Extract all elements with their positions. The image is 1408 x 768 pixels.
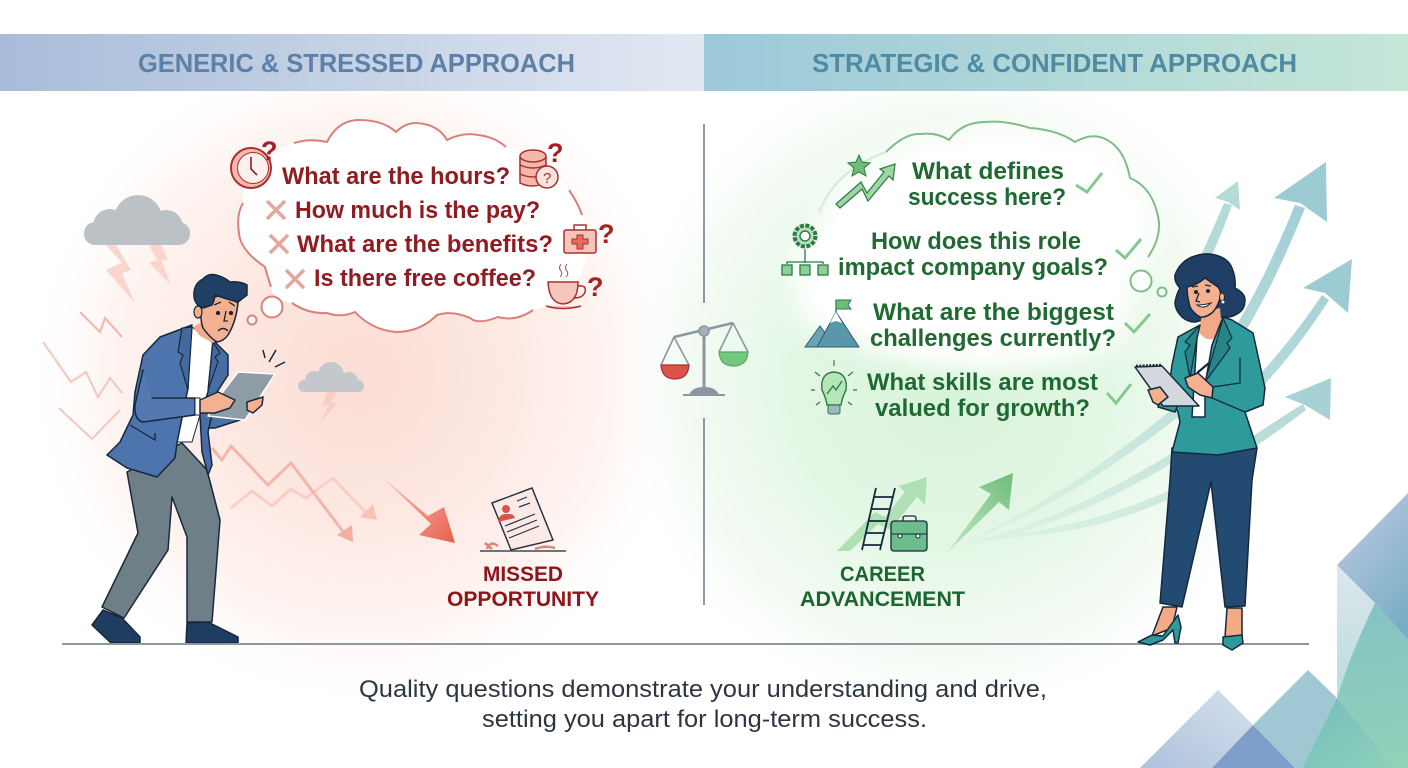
icon: coins: ? xyxy=(543,170,551,187)
icon: coins xyxy=(520,138,564,188)
question: company goals: impact company goals? xyxy=(838,254,1108,281)
label: missed opportunity: MISSED xyxy=(483,563,563,586)
label: missed opportunity: OPPORTUNITY xyxy=(447,588,599,611)
background glow: red side xyxy=(0,91,704,768)
center divider xyxy=(703,124,705,605)
hair xyxy=(194,274,247,308)
notepad xyxy=(1135,365,1199,406)
right arm xyxy=(1212,358,1245,412)
hands and pen xyxy=(1148,363,1213,405)
icon: medical kit xyxy=(564,219,614,253)
question: skills xyxy=(867,369,1098,422)
check marks xyxy=(1076,173,1150,403)
storm cloud large xyxy=(84,195,190,245)
red down arrow xyxy=(381,476,455,543)
right lapel xyxy=(208,342,220,390)
icon: light bulb xyxy=(811,360,857,414)
footer takeaway: setting you apart for long-term success. xyxy=(482,706,927,733)
confident woman figure xyxy=(1135,254,1265,650)
header bar: generic and stressed approach xyxy=(0,34,704,91)
sleeve xyxy=(135,370,195,422)
icon: ladder and briefcase xyxy=(837,477,927,551)
trousers xyxy=(1160,448,1257,607)
lower sleeve xyxy=(209,414,240,428)
pocket xyxy=(130,425,155,440)
jacket right front xyxy=(200,340,228,475)
shirt xyxy=(1192,338,1217,417)
small lightning bolt xyxy=(319,392,337,425)
left lapel xyxy=(178,327,192,390)
question: skills: What skills are most xyxy=(867,369,1098,396)
question: skills: valued for growth? xyxy=(875,395,1090,422)
falling zigzag lines xyxy=(43,312,122,439)
question: defines success xyxy=(908,158,1066,211)
left lapel xyxy=(1185,325,1200,378)
footer takeaway: Quality questions demonstrate your understanding and drive, xyxy=(359,676,1047,703)
question: defines success: What defines xyxy=(912,158,1064,185)
jacket body xyxy=(107,325,192,477)
face details xyxy=(1192,285,1211,307)
alert ticks xyxy=(263,350,285,367)
hair xyxy=(1175,254,1245,322)
storm cloud small xyxy=(298,362,364,392)
question: defines success: success here? xyxy=(908,184,1066,211)
label: missed opportunity xyxy=(447,563,599,611)
question: challenges: What are the biggest xyxy=(873,299,1114,326)
ground line xyxy=(62,643,1309,645)
icon: balance scale xyxy=(661,323,748,395)
hands xyxy=(200,392,235,413)
shoes xyxy=(92,610,238,643)
question: challenges: challenges currently? xyxy=(870,325,1116,352)
icon: document missed opportunity xyxy=(480,488,566,551)
thought bubble: strategic questions xyxy=(782,122,1166,422)
icon: coffee cup xyxy=(546,264,604,308)
neck xyxy=(193,322,217,343)
header bar: strategic and confident approach: STRATEGIC & CONFIDENT APPROACH xyxy=(812,48,1297,78)
question: company goals xyxy=(838,228,1108,281)
question: company goals: How does this role xyxy=(871,228,1081,255)
right lapel xyxy=(1205,318,1232,382)
stressed man figure xyxy=(92,274,285,643)
icon: gear and org chart xyxy=(782,226,828,275)
icon: coffee cup: ? xyxy=(587,272,604,302)
thought bubble: generic questions xyxy=(231,120,614,332)
header bar: generic and stressed approach: GENERIC & STRESSED APPROACH xyxy=(138,48,575,78)
icon: mountain with flag xyxy=(805,300,859,347)
x marks xyxy=(267,201,304,288)
shoes xyxy=(1138,607,1243,650)
question: coffee: Is there free coffee? xyxy=(314,265,536,292)
ear and earring xyxy=(1220,293,1225,304)
lightning bolts xyxy=(106,245,171,303)
header bar: strategic and confident approach xyxy=(704,34,1408,91)
footer takeaway xyxy=(359,676,1047,733)
green growth arrow xyxy=(947,473,1013,553)
ear xyxy=(194,306,202,318)
icon: clock: ? xyxy=(261,136,278,166)
label: career advancement: ADVANCEMENT xyxy=(800,588,965,611)
neck xyxy=(1198,308,1222,342)
falling chart arrows xyxy=(212,446,377,542)
geometric corner decoration xyxy=(1140,493,1408,768)
face xyxy=(1187,278,1221,317)
face details xyxy=(214,302,235,331)
question: challenges xyxy=(870,299,1116,352)
cuff xyxy=(195,398,200,415)
head xyxy=(201,295,238,342)
label: career advancement xyxy=(800,563,965,611)
shirt xyxy=(177,327,213,442)
background glow: green side xyxy=(600,91,1408,768)
question: hours: What are the hours? xyxy=(282,163,510,190)
icon: coins: ? xyxy=(547,138,564,168)
icon: medical kit: ? xyxy=(598,219,614,249)
trousers xyxy=(102,443,220,622)
question: benefits: What are the benefits? xyxy=(297,231,553,258)
tablet xyxy=(208,372,275,420)
left sleeve xyxy=(1158,392,1180,412)
rising arrows behind woman xyxy=(950,162,1352,548)
question: pay: How much is the pay? xyxy=(295,197,540,224)
label: career advancement: CAREER xyxy=(840,563,925,586)
icon: clock xyxy=(231,136,278,188)
icon: star and growth arrow xyxy=(836,155,895,208)
jacket xyxy=(1168,317,1265,455)
